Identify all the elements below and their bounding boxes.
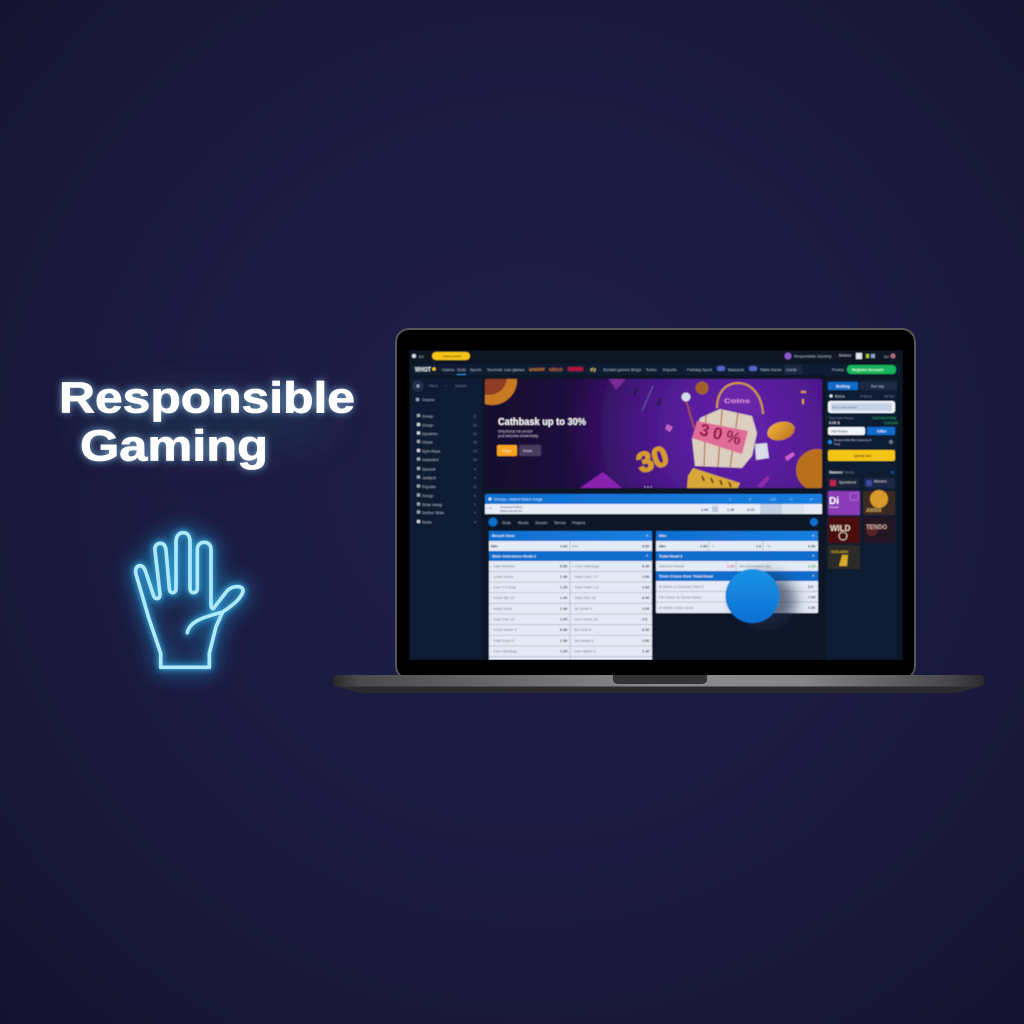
menu rows: Group: [422, 422, 434, 428]
table rows left: + Over Handicap: [572, 564, 599, 568]
menu rows: Popular: [422, 484, 436, 489]
navigation bar: Sports: [470, 367, 482, 372]
bet slip: Bonus: [835, 394, 845, 398]
navigation bar: Turbo: [646, 367, 657, 372]
tabs row: Roots: [518, 520, 528, 525]
odds table right: To: [767, 544, 771, 548]
navigation bar: UEGO: [549, 367, 563, 372]
top bar: Balance: [839, 354, 851, 358]
navigation bar: Cards: [786, 367, 797, 372]
top bar: [411, 351, 896, 361]
menu rows: 24: [473, 450, 477, 454]
table rows left: - Under Score: [491, 575, 513, 579]
bet slip: Bet Calculation: [832, 406, 858, 410]
navigation bar: Live games: [504, 367, 524, 372]
menu rows: Duther Slide: [422, 510, 445, 515]
menu rows: [417, 414, 477, 524]
menu rows: 14: [473, 458, 477, 462]
table rows left: - Over Handicap: [491, 650, 517, 654]
games heading: Trends: [843, 470, 854, 474]
menu rows: Spin Race: [422, 448, 441, 454]
odds table left: ^: [646, 534, 649, 538]
odds table right: Team Cross Over Total Head: [659, 574, 714, 578]
menu rows: 16: [473, 440, 477, 444]
match header: Match Result list: [500, 509, 522, 513]
table rows left: 1.40: [560, 650, 567, 654]
menu rows: Special: [422, 466, 435, 472]
match header: 3.70: [747, 508, 754, 512]
laptop lid: [396, 329, 915, 679]
table rows left: 6.40: [642, 564, 649, 568]
odds table left: ^: [646, 554, 649, 558]
table rows left: - Su Under 4: [572, 607, 592, 611]
table rows left: 6.40: [642, 596, 649, 600]
navigation bar: Register Account: [852, 368, 884, 372]
bet slip: [828, 382, 899, 461]
odds table right: 2.50: [808, 544, 815, 548]
bet slip: Total Odds Payout: [829, 416, 854, 420]
table rows left: 1.60: [560, 618, 567, 622]
navigation bar: [411, 364, 901, 375]
table rows left: 2.5: [642, 618, 647, 622]
navigation bar: Bingo: [631, 367, 642, 372]
menu rows: Jackpot: [422, 475, 437, 480]
menu rows: 11: [473, 414, 477, 418]
bet slip: Add Bonus: [831, 430, 848, 434]
game thumbnails: AMMA: [865, 508, 882, 514]
banner buttons: Enjoy: [502, 449, 511, 453]
menu rows: Retro: [422, 520, 433, 524]
top bar: Latest promo: [442, 354, 462, 358]
table rows left: [489, 561, 652, 660]
game thumbnails: WILD: [830, 524, 851, 533]
match header: 1.40: [701, 508, 708, 512]
game thumbnails: Di: [829, 496, 839, 507]
odds table right: 1.92: [727, 564, 734, 568]
game pills: Sportsbook: [839, 480, 856, 484]
bet slip: 4 Items: [860, 394, 872, 398]
tabs row: Soccer: [535, 520, 548, 525]
slot machine: Coins: [724, 398, 751, 405]
banner buttons: [497, 445, 541, 456]
match header: Newsstand Back: [500, 505, 523, 509]
menu rows: 5: [474, 494, 476, 498]
slot machine: 30%: [698, 420, 743, 449]
left sidebar: [411, 378, 482, 660]
bet slip: Cashback: [884, 421, 899, 425]
top bar: En: [419, 354, 424, 359]
table rows left: 1.50: [560, 639, 567, 643]
table rows left: 1.90: [560, 607, 567, 611]
laptop base: [333, 675, 984, 693]
navigation bar: WHOT: [415, 368, 431, 374]
tabs row: Tennis: [554, 520, 566, 525]
menu rows: Group: [422, 414, 434, 418]
tabs row: Slots: [502, 520, 511, 525]
match header: U: [790, 498, 793, 502]
title: Responsible: [59, 374, 355, 422]
odds table right: 7.50: [808, 596, 815, 600]
navigation bar: Baccarat: [728, 367, 745, 372]
tabs row: Players: [572, 520, 585, 525]
bet slip: Betting: [836, 384, 850, 388]
left sidebar: +: [445, 384, 447, 388]
odds table right: ^: [812, 554, 815, 558]
odds table left: 5.50: [642, 544, 649, 548]
right sidebar: [826, 379, 899, 660]
match header: 1: [729, 498, 731, 502]
title: Gaming: [80, 422, 268, 470]
odds table right: In Match Home Score: [659, 606, 694, 610]
title: Gaming: [80, 422, 268, 470]
banner pager: [644, 486, 652, 488]
match header: X: [749, 498, 752, 502]
banner text: [498, 430, 538, 438]
match header: Groups, related Match Jusge: [494, 498, 543, 502]
table rows left: - Total Under 1.5: [572, 586, 599, 590]
menu rows: Instanted: [422, 457, 438, 462]
games heading: Games: [829, 470, 843, 474]
odds table right: Pot Home vs Tennis Match: [659, 596, 702, 600]
odds table left: [489, 531, 652, 660]
match header: H: [810, 498, 813, 502]
table rows left: 5.50: [560, 564, 567, 568]
table rows left: - Home Bet 15: [491, 596, 514, 600]
banner decorations: [484, 378, 823, 489]
table rows left: - Over 2.5 Goal: [491, 586, 516, 590]
odds table right: 5.6: [808, 585, 813, 589]
table rows left: 6.40: [642, 628, 649, 632]
navigation bar: Scratch games: [603, 367, 630, 372]
match header: 1.40: [727, 508, 734, 512]
odds table right: Matched Result: [659, 564, 684, 568]
odds table right: X: [712, 544, 715, 548]
odds table right: 1.6: [756, 544, 761, 548]
menu rows: 4: [474, 476, 476, 480]
game pills: Winners: [874, 480, 887, 484]
menu rows: 1: [474, 503, 476, 507]
table rows left: 6.40: [560, 628, 567, 632]
odds table right: Win: [659, 544, 667, 548]
odds table right: [656, 531, 818, 613]
navigation bar: Fantasy Sport: [687, 367, 713, 372]
promo banner: [484, 378, 823, 489]
table rows left: - Total Over 16: [572, 596, 596, 600]
odds table right: ^: [812, 534, 815, 538]
table rows left: 1.40: [642, 650, 649, 654]
game thumbnails: Games: [829, 505, 839, 509]
table rows left: 1.00: [642, 607, 649, 611]
games heading: [829, 470, 894, 474]
tabs row: [488, 518, 818, 526]
odds table left: Main Outcomes Head 2: [492, 554, 537, 558]
navigation bar: Table Game: [760, 367, 782, 372]
game pills: [828, 478, 895, 488]
menu rows: Chest: [422, 440, 433, 444]
menu rows: 12: [473, 432, 477, 436]
title: [59, 374, 355, 470]
navigation bar: Casino: [442, 367, 455, 372]
bet slip: Quick bet: [854, 454, 872, 458]
top bar: En: [884, 354, 889, 359]
game thumbnails: [828, 490, 895, 569]
icon: neon hand: [136, 533, 243, 667]
table rows left: 1.50: [642, 575, 649, 579]
navigation bar: Slots: [457, 367, 466, 372]
table rows left: - Bet Goal 8: [572, 628, 591, 632]
odds table left: 1.60: [560, 544, 567, 548]
table rows left: - Home Match 8: [491, 628, 517, 632]
banner text: Only bonus mix on slot: [498, 430, 532, 434]
table rows left: - Away Score: [491, 607, 512, 611]
match header: 1X2: [770, 498, 776, 502]
game thumbnails: GOLDEN: [831, 549, 848, 554]
table rows left: 1.40: [560, 586, 567, 590]
odds table right: In Match & Outcome Over 5: [659, 585, 704, 589]
table rows left: 1.40: [560, 575, 567, 579]
table rows left: - Total Score 9: [491, 639, 514, 643]
bet slip: Offer: [877, 428, 887, 434]
odds table right: ^: [812, 574, 815, 578]
match header: [485, 494, 822, 514]
left sidebar: Casino: [422, 397, 435, 402]
banner heading: Cathbask up to 30%: [498, 416, 587, 428]
table rows left: - Set Under 6: [572, 639, 593, 643]
navigation bar: Promo: [832, 367, 845, 372]
blue circle button: [726, 569, 796, 630]
game thumbnails: TENDO: [866, 525, 887, 531]
bet slip: Total: [834, 442, 841, 446]
navigation bar: Tournois: [487, 367, 502, 372]
table rows left: - Over Under 16: [572, 618, 598, 622]
odds table right: Total Head 2: [659, 554, 683, 558]
odds table right: 1.50: [700, 544, 707, 548]
navigation bar: Esports: [663, 367, 677, 372]
bet slip: Responsible Bet Currency #: [834, 438, 872, 442]
top bar: Responsible Gaming: [794, 354, 831, 358]
table rows left: - Team Over 1.5: [572, 575, 598, 579]
table rows left: 1.50: [642, 639, 649, 643]
menu rows: 4: [474, 468, 476, 472]
menu rows: Slide Hang: [422, 502, 442, 507]
odds table left: Win: [491, 544, 499, 548]
odds table right: 1.50: [808, 606, 815, 610]
bet slip: 0.00 $: [829, 421, 840, 425]
menu rows: 4: [474, 520, 476, 524]
odds table left: Result View: [492, 533, 515, 538]
laptop: [333, 329, 984, 693]
table rows left: 1.40: [560, 596, 567, 600]
bet slip: All bet: [884, 394, 894, 398]
left sidebar: Menu: [429, 384, 438, 388]
banner buttons: Know: [523, 449, 532, 453]
laptop screen: [409, 350, 903, 660]
banner text: your welcome cheek today: [498, 434, 538, 438]
slot machine: [682, 383, 769, 488]
odds table right: 2.25: [808, 564, 815, 568]
navigation bar: UNOFF: [529, 367, 545, 372]
odds table right: Win: [659, 533, 667, 538]
bet slip: Bet slip: [871, 384, 885, 388]
match header: Lvls: [487, 506, 493, 510]
table rows left: - Goal Over 15: [491, 618, 515, 622]
menu rows: 20: [473, 424, 477, 428]
left sidebar: Search: [455, 384, 466, 388]
gold 30: 30: [633, 440, 672, 479]
menu rows: Dynamic: [422, 431, 438, 436]
bet slip: Cashback Parlay: [872, 416, 897, 420]
table rows left: - Total Matches: [491, 564, 516, 568]
odds table left: Win: [572, 544, 578, 548]
navigation bar: zly: [590, 367, 597, 372]
odds table right: Win Dominance Bet: [739, 564, 771, 568]
menu rows: 4: [474, 511, 476, 515]
match header: -: [770, 508, 772, 512]
table rows left: - Over Match 5: [572, 650, 596, 654]
table rows left: 1.60: [642, 586, 649, 590]
menu rows: 12: [473, 485, 477, 489]
title: Responsible: [59, 374, 355, 422]
menu rows: Group: [422, 493, 434, 498]
